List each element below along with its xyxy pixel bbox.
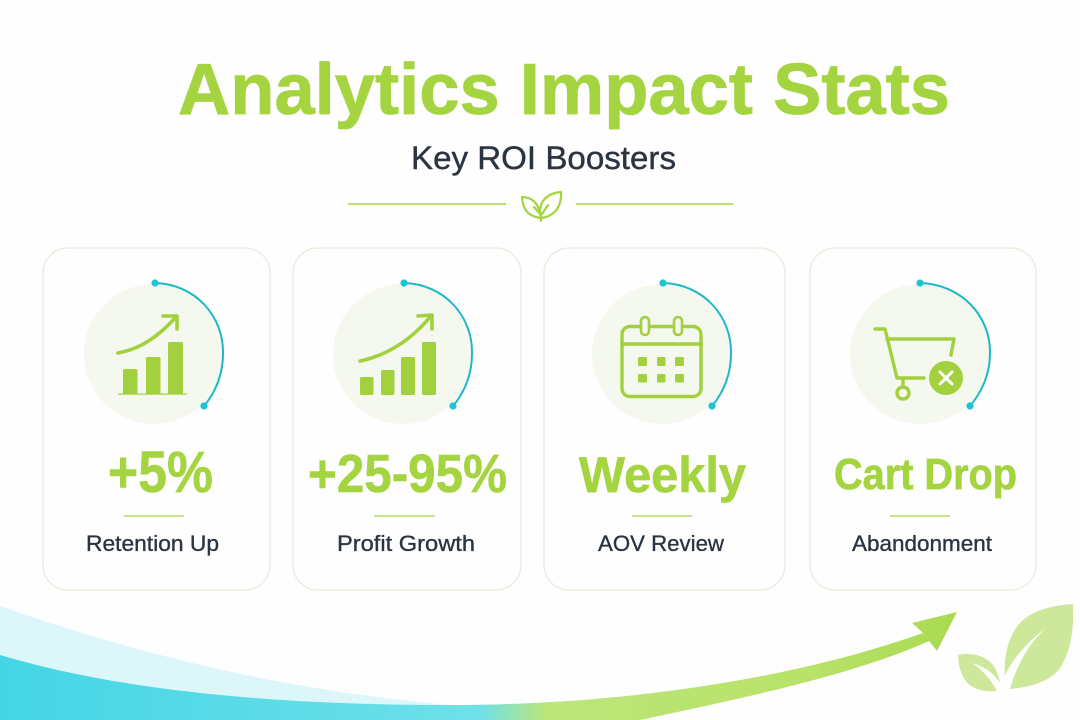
subtitle: Key ROI Boosters bbox=[411, 140, 676, 176]
title: Analytics Impact Stats bbox=[178, 50, 950, 130]
stat label: Abandonment bbox=[852, 531, 992, 556]
title divider with leaf bbox=[348, 192, 733, 221]
icon disc with progress arc bbox=[84, 279, 224, 424]
panel: profit card bbox=[293, 248, 521, 590]
icon: large corner leaves bbox=[958, 604, 1073, 691]
icon: divider leaf bbox=[522, 192, 561, 221]
panel: cart card bbox=[810, 248, 1036, 590]
panel: retention card bbox=[43, 248, 270, 590]
icon disc with progress arc bbox=[592, 279, 732, 424]
icon: rising bar chart bbox=[118, 316, 187, 395]
stat label: AOV Review bbox=[598, 531, 724, 556]
stat value: Weekly bbox=[579, 447, 746, 503]
light teal swoosh bbox=[0, 606, 450, 706]
stat value: Cart Drop bbox=[834, 450, 1017, 499]
stat label: Retention Up bbox=[86, 531, 219, 556]
icon disc with progress arc bbox=[333, 279, 473, 424]
stat value: +25-95% bbox=[308, 444, 507, 504]
stat value: +5% bbox=[108, 440, 213, 505]
icon: cart with x badge bbox=[875, 329, 963, 399]
icon disc with progress arc bbox=[850, 279, 990, 424]
icon: rising four-bar chart bbox=[360, 315, 436, 395]
growth arrow swoosh bbox=[0, 612, 957, 720]
icon: calendar bbox=[622, 317, 701, 396]
panel: weekly card bbox=[544, 248, 785, 590]
stat label: Profit Growth bbox=[337, 531, 475, 556]
